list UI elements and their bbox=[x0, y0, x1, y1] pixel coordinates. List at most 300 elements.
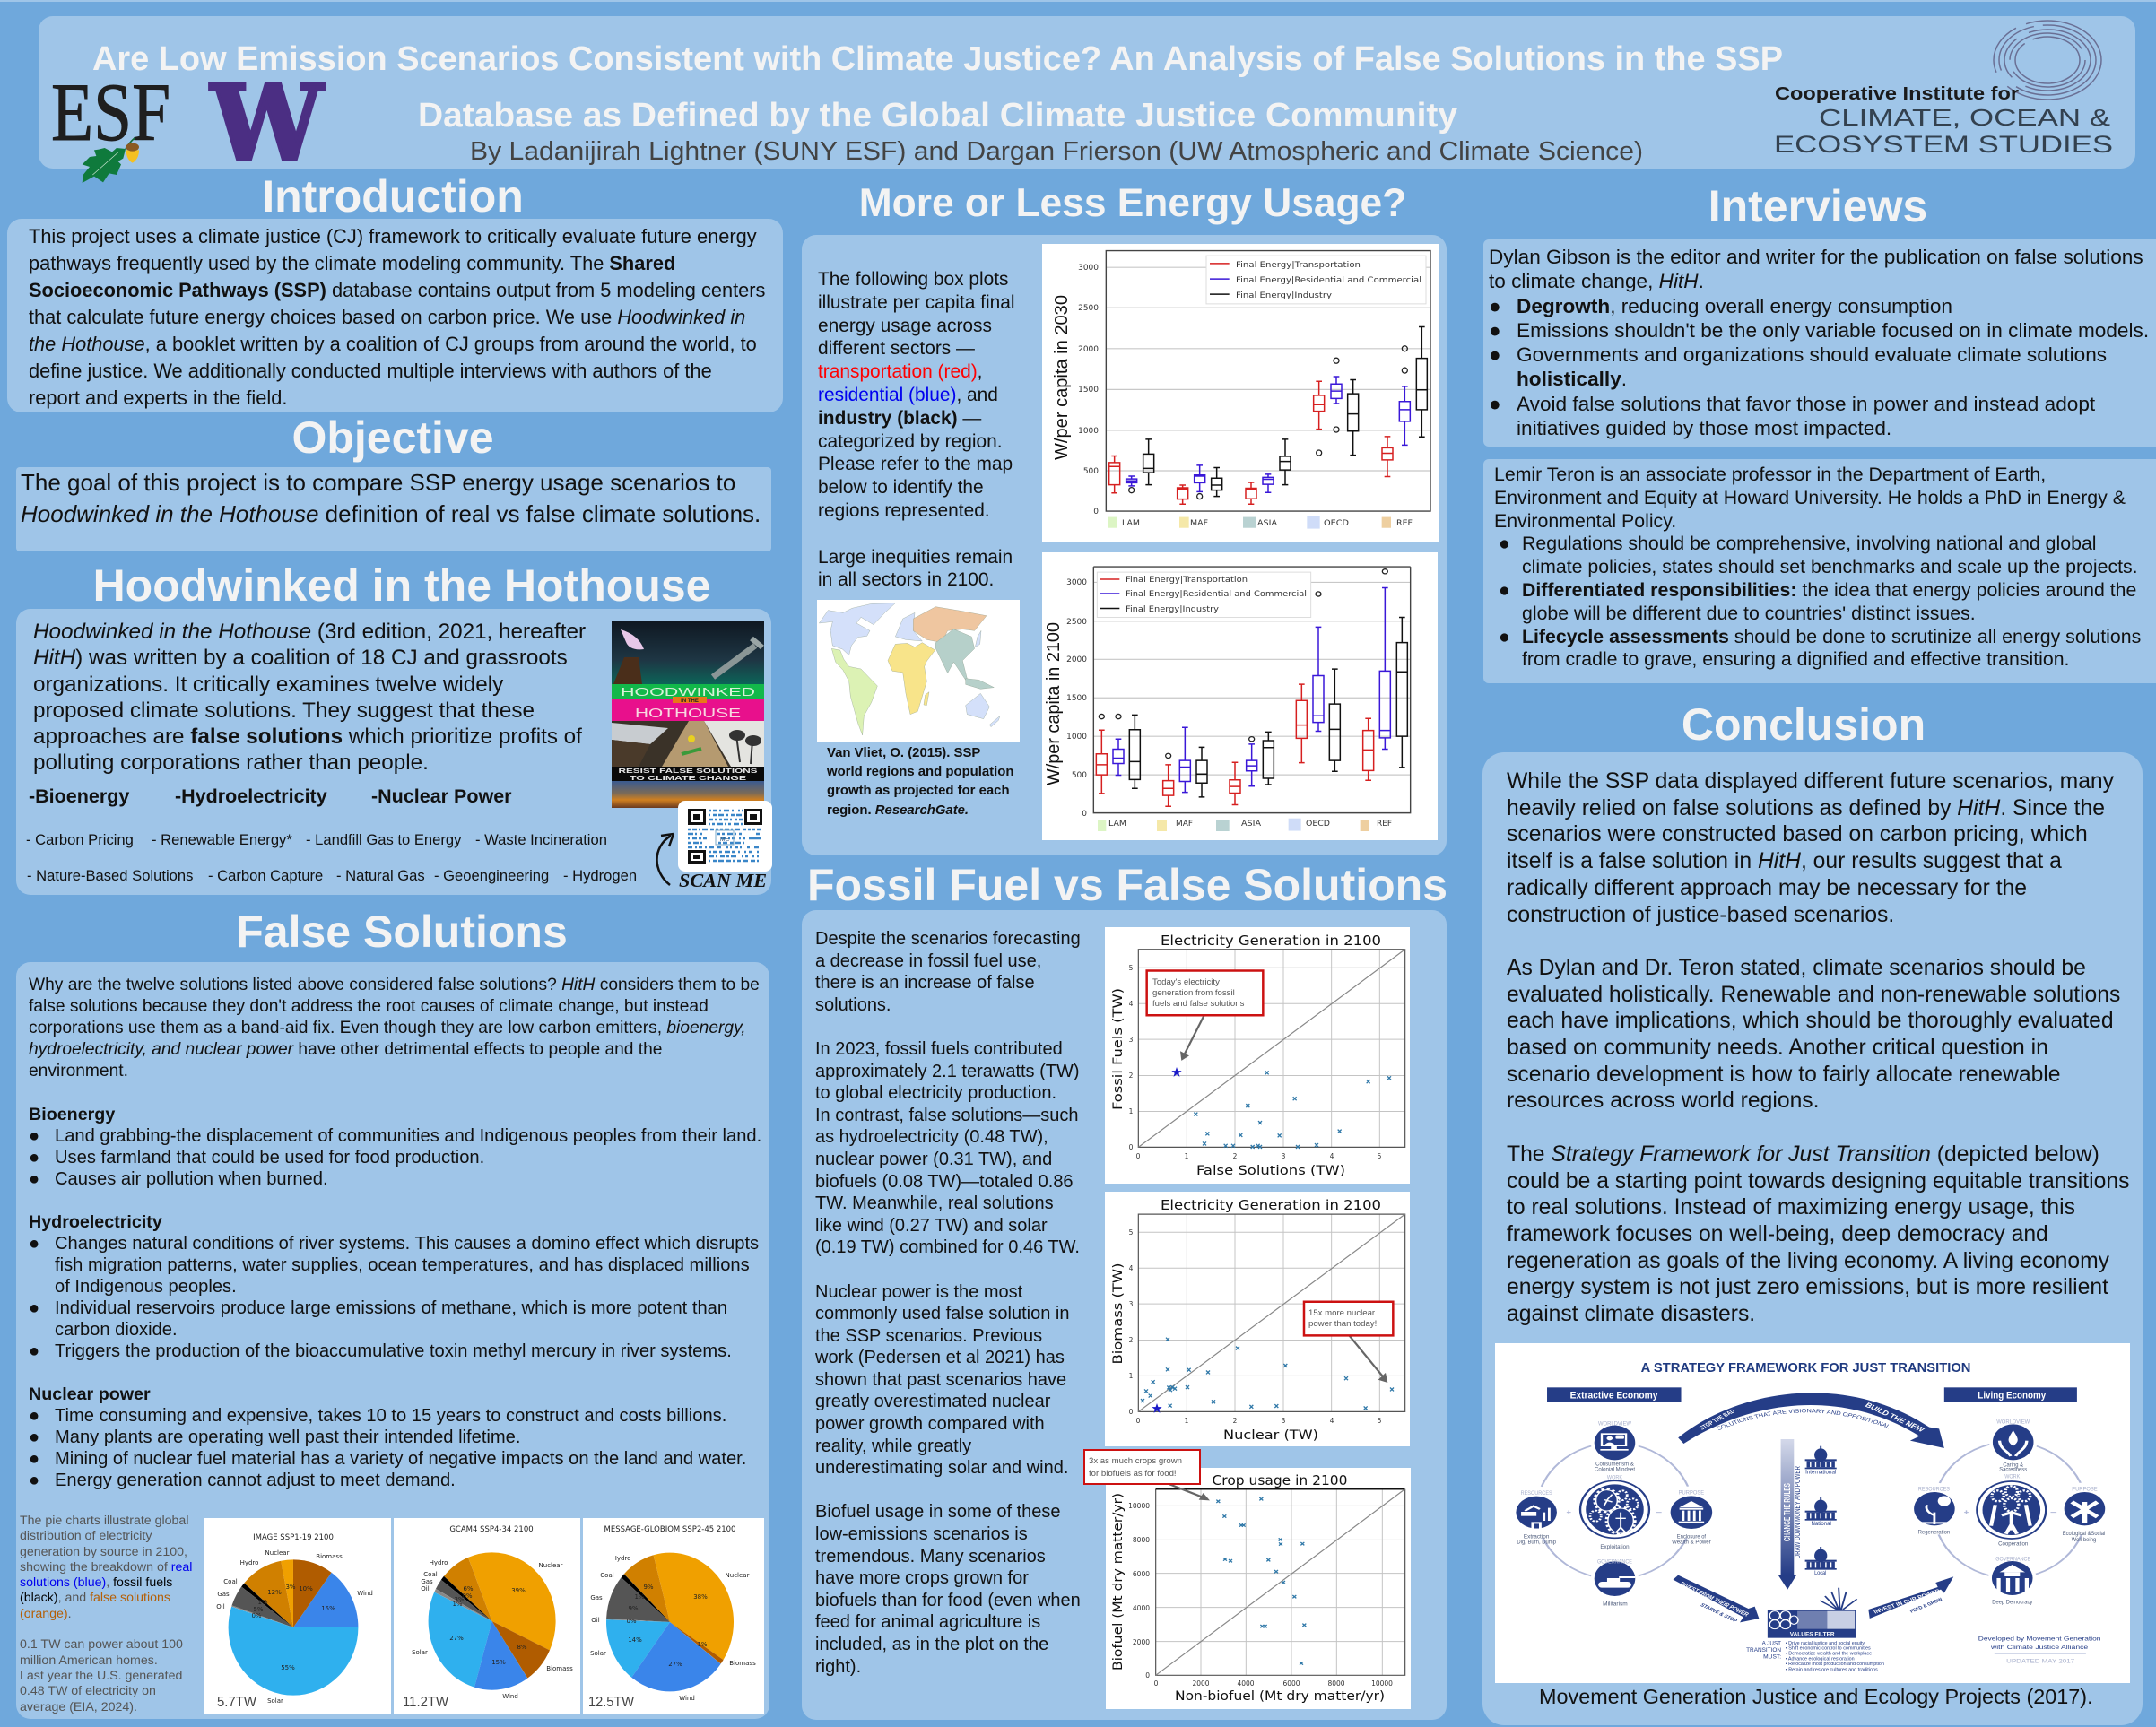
header banner bbox=[39, 16, 2135, 185]
text: introduction: pathways frequently used by the climate modeling community. The Shared bbox=[29, 252, 675, 274]
text: false solutions explanation: Uses farmland that could be used for food production. bbox=[55, 1148, 484, 1167]
text: extractive cycle labels: RESOURCES bbox=[1521, 1489, 1552, 1497]
text: map citation: Van Vliet, O. (2015). SSP bbox=[827, 746, 980, 760]
chart: scatter crop usage: 8000 bbox=[1327, 1679, 1345, 1688]
text: energy usage explanation: industry (black) — bbox=[818, 408, 981, 429]
extractive economy cycle bbox=[1510, 1421, 1717, 1601]
text: other false solutions list: - Carbon Capture bbox=[208, 867, 323, 884]
chart: pie GCAM4 SSP4-34: GCAM4 SSP4-34 2100 bbox=[449, 1525, 534, 1534]
text: pie chart explanation: solutions (blue), fossil fuels bbox=[20, 1575, 172, 1590]
chart: box plot 2100 bbox=[1042, 552, 1438, 840]
text: conclusion: construction of justice-based scenarios. bbox=[1507, 903, 1894, 927]
chart: scatter biomass vs nuclear: 3 bbox=[1129, 1300, 1134, 1308]
chart: scatter crop usage: 2000 bbox=[1133, 1638, 1150, 1646]
text: false solutions explanation bbox=[29, 976, 761, 1490]
text: interview Dylan Gibson: to climate change, HitH. bbox=[1489, 270, 1704, 292]
text: introduction: the Hothouse, a booklet written by a coalition of CJ groups from around the world, to bbox=[29, 333, 757, 355]
text: false solutions explanation: ● bbox=[29, 1234, 39, 1254]
chart: box plot 2100: 2500 bbox=[1066, 618, 1087, 627]
chart: box plot 2030: MAF bbox=[1190, 519, 1208, 528]
text: other false solutions list: - Hydrogen bbox=[563, 867, 637, 884]
text: living cycle labels: Sacredness bbox=[1999, 1466, 2027, 1472]
text: three main false solutions: -Nuclear Power bbox=[371, 785, 512, 807]
text: interview Lemir Teron: Differentiated responsibilities: the idea that energy policies around the bbox=[1522, 579, 2136, 601]
chart: pie GCAM4 SSP4-34: 6% bbox=[463, 1585, 474, 1592]
text: interview Dylan Gibson: Governments and organizations should evaluate climate solutions bbox=[1517, 343, 2107, 366]
text: interview Lemir Teron: ● bbox=[1499, 626, 1510, 647]
text: other false solutions list: - Renewable Energy* bbox=[152, 831, 292, 848]
chart: box plot 2100: MAF bbox=[1176, 820, 1193, 829]
icons: government levels: Local bbox=[1814, 1569, 1827, 1576]
image: Hoodwinked book cover: RESIST FALSE SOLUTIONS bbox=[619, 768, 758, 775]
text: interview Dylan Gibson: Degrowth, reducing overall energy consumption bbox=[1517, 295, 1952, 317]
title: Database as Defined by the Global Climate Justice Community bbox=[418, 97, 1457, 135]
chart: pie MESSAGE-GLOBIOM SSP2-45: Biomass bbox=[729, 1660, 756, 1667]
chart: pie GCAM4 SSP4-34: 39% bbox=[511, 1587, 526, 1594]
text: living cycle labels: Cooperation bbox=[1998, 1540, 2028, 1547]
arrow: change the rules: CHANGE THE RULES bbox=[1782, 1483, 1792, 1541]
chart: box plot 2030: 1000 bbox=[1078, 427, 1099, 436]
text: map citation: growth as projected for each bbox=[827, 784, 1010, 798]
chart: box plot 2030: 2000 bbox=[1078, 345, 1099, 354]
text: false solutions explanation: ● bbox=[29, 1341, 39, 1361]
chart: scatter crop usage: 10000 bbox=[1371, 1679, 1393, 1688]
chart: pie IMAGE SSP1-19: 0% bbox=[251, 1612, 262, 1619]
chart: box plot 2030: 2500 bbox=[1078, 304, 1099, 313]
chart: scatter fossil fuels vs false solutions: generation from fossil bbox=[1152, 988, 1235, 998]
text: energy usage explanation: categorized by region. bbox=[818, 431, 1003, 452]
chart: scatter fossil fuels vs false solutions bbox=[1105, 927, 1410, 1184]
chart: scatter crop usage: 4000 bbox=[1237, 1679, 1255, 1688]
text: fossil fuel explanation: to global electricity production. bbox=[815, 1083, 1056, 1103]
text: fossil fuel explanation: feed for animal agriculture is bbox=[815, 1612, 1040, 1632]
arrow: stop the bad, build the new: STOP THE BAD bbox=[1698, 1408, 1737, 1431]
chart: pie GCAM4 SSP4-34: Biomass bbox=[546, 1665, 573, 1672]
arrow: divest from their power: STARVE & STOP bbox=[1699, 1602, 1738, 1624]
arrow: invest in our power: INVEST IN OUR POWER bbox=[1872, 1587, 1943, 1615]
text: interview Lemir Teron: Environmental Policy. bbox=[1494, 510, 1676, 532]
image: Hoodwinked book cover bbox=[612, 621, 764, 808]
chart: box plot 2030: LAM bbox=[1122, 519, 1140, 528]
text: framework credit: with Climate Justice Alliance bbox=[1990, 1644, 2089, 1651]
text: false solutions explanation: Mining of nuclear fuel material has a variety of negative impacts on the land and water. bbox=[55, 1449, 746, 1469]
text: pie chart explanation: distribution of electricity bbox=[20, 1529, 152, 1543]
text: introduction: This project uses a climate justice (CJ) framework to critically evaluate future energy bbox=[29, 225, 757, 247]
text: false solutions explanation: corporations use them as a band-aid fix. Even though they are low carbon emitters, bioenergy, bbox=[29, 1019, 746, 1037]
living economy cycle bbox=[1908, 1420, 2111, 1600]
heading: More or Less Energy Usage?: More or Less Energy Usage? bbox=[859, 181, 1406, 225]
chart: pie MESSAGE-GLOBIOM SSP2-45 bbox=[583, 1518, 764, 1714]
text: false solutions explanation: ● bbox=[29, 1449, 39, 1469]
label: Living Economy bbox=[1944, 1387, 2077, 1402]
text: energy usage explanation: illustrate per capita final bbox=[818, 292, 1014, 313]
chart: pie MESSAGE-GLOBIOM SSP2-45: MESSAGE-GLOBIOM SSP2-45 2100 bbox=[604, 1525, 735, 1534]
text: fossil fuel explanation: biofuels (0.08 TW)—totaled 0.86 bbox=[815, 1172, 1074, 1192]
text: interview Dylan Gibson: ● bbox=[1489, 393, 1501, 415]
text: fossil fuel explanation: as hydroelectricity (0.48 TW), bbox=[815, 1127, 1048, 1147]
text: interview Dylan Gibson: Avoid false solutions that favor those in power and instead adopt bbox=[1517, 393, 2095, 415]
chart: pie MESSAGE-GLOBIOM SSP2-45: Gas bbox=[590, 1594, 603, 1601]
title bbox=[92, 40, 1783, 135]
chart: box plot 2100: Final Energy|Industry bbox=[1126, 605, 1220, 614]
label: Living Economy: Living Economy bbox=[1978, 1390, 2047, 1401]
chart: scatter biomass vs nuclear: 0 bbox=[1136, 1417, 1141, 1425]
text: conclusion: scenarios were constructed based on carbon pricing, which bbox=[1507, 822, 2088, 846]
text: fossil fuel explanation: right). bbox=[815, 1657, 861, 1677]
text: false solutions explanation: Nuclear power bbox=[29, 1384, 151, 1404]
text: objective: Hoodwinked in the Hothouse definition of real vs false climate solutions. bbox=[21, 500, 761, 527]
chart: scatter fossil fuels vs false solutions: 2 bbox=[1129, 1072, 1134, 1080]
panel: false solutions bbox=[16, 962, 769, 1719]
text: living cycle labels bbox=[1918, 1419, 2106, 1605]
text: false solutions explanation: ● bbox=[29, 1471, 39, 1490]
text: hoodwinked description bbox=[33, 620, 586, 775]
chart: scatter fossil fuels vs false solutions: False Solutions (TW) bbox=[1196, 1164, 1345, 1178]
text: hoodwinked description: polluting corporations rather than people. bbox=[33, 751, 429, 775]
text: three main false solutions: -Bioenergy bbox=[29, 785, 129, 807]
chart: pie IMAGE SSP1-19: Gas bbox=[217, 1591, 230, 1598]
text: conclusion: The Strategy Framework for Just Transition (depicted below) bbox=[1507, 1142, 2099, 1167]
chart: pie GCAM4 SSP4-34: Nuclear bbox=[539, 1562, 563, 1569]
text: extractive cycle labels: Wealth & Power bbox=[1672, 1539, 1711, 1545]
text: conclusion: each have implications, which should be thoroughly evaluated bbox=[1507, 1009, 2114, 1033]
text: interview Dylan Gibson: ● bbox=[1489, 343, 1501, 366]
icon: QR code bbox=[678, 801, 772, 872]
text: a just transition must bbox=[1746, 1640, 1884, 1672]
arrow: change the rules bbox=[1778, 1439, 1802, 1590]
text: other false solutions list: - Geoengineering bbox=[434, 867, 549, 884]
chart: box plot 2100: 0 bbox=[1082, 810, 1087, 819]
text: interview Lemir Teron: Environment and Equity at Howard University. He holds a PhD in Energy & bbox=[1494, 487, 2126, 508]
chart: pie GCAM4 SSP4-34: 15% bbox=[491, 1659, 506, 1666]
chart: pie MESSAGE-GLOBIOM SSP2-45: Wind bbox=[679, 1695, 695, 1702]
chart: box plot 2100: REF bbox=[1377, 820, 1392, 829]
text: extractive cycle labels: PURPOSE bbox=[1679, 1489, 1704, 1496]
text: fossil fuel explanation: TW. Meanwhile, real solutions bbox=[815, 1193, 1054, 1213]
chart: scatter fossil fuels vs false solutions: 3 bbox=[1282, 1152, 1286, 1160]
chart: scatter fossil fuels vs false solutions: 0 bbox=[1136, 1152, 1141, 1160]
text: objective: The goal of this project is to compare SSP energy usage scenarios to bbox=[21, 469, 735, 496]
text: fossil fuel explanation: commonly used false solution in bbox=[815, 1304, 1069, 1323]
text: pie chart explanation: 0.48 TW of electricity on bbox=[20, 1684, 156, 1698]
text: false solutions explanation: carbon dioxide. bbox=[55, 1320, 178, 1340]
text: conclusion: regeneration as goals of the living economy. A living economy bbox=[1507, 1249, 2109, 1273]
chart: scatter fossil fuels vs false solutions: 4 bbox=[1330, 1152, 1334, 1160]
text: hoodwinked description: proposed climate solutions. They suggest that these bbox=[33, 699, 535, 723]
chart: pie GCAM4 SSP4-34 bbox=[394, 1518, 580, 1714]
chart: box plot 2030: ASIA bbox=[1257, 519, 1278, 528]
chart: scatter biomass vs nuclear: Biomass (TW) bbox=[1111, 1263, 1126, 1365]
chart: pie GCAM4 SSP4-34: Gas bbox=[421, 1578, 433, 1585]
text: living cycle labels: GOVERNANCE bbox=[1995, 1556, 2030, 1562]
text: extractive cycle labels: Enclosure of bbox=[1677, 1533, 1707, 1540]
chart: pie MESSAGE-GLOBIOM SSP2-45: 9% bbox=[628, 1605, 639, 1612]
text: fossil fuel explanation: In 2023, fossil fuels contributed bbox=[815, 1039, 1063, 1059]
title: Are Low Emission Scenarios Consistent with Climate Justice? An Analysis of False Solutions in the SSP bbox=[92, 40, 1783, 78]
text: fossil fuel explanation: (0.19 TW) combined for 0.46 TW. bbox=[815, 1237, 1080, 1257]
text: introduction: Socioeconomic Pathways (SSP) database contains output from 5 modeling centers bbox=[29, 279, 765, 301]
chart: pie IMAGE SSP1-19: 15% bbox=[321, 1605, 335, 1612]
heading: False Solutions: False Solutions bbox=[236, 907, 568, 957]
text: introduction bbox=[29, 225, 765, 409]
chart: scatter crop usage: 6000 bbox=[1282, 1679, 1300, 1688]
text: a just transition must: • Democratize wealth and the workplace bbox=[1786, 1652, 1872, 1656]
panel: energy usage bbox=[802, 235, 1447, 855]
heading: Fossil Fuel vs False Solutions: Fossil Fuel vs False Solutions bbox=[807, 860, 1447, 910]
chart: scatter crop usage: 2000 bbox=[1192, 1679, 1210, 1688]
chart: box plot 2030: 1500 bbox=[1078, 386, 1099, 395]
text: hoodwinked description: HitH) was written by a coalition of 18 CJ and grassroots bbox=[33, 646, 568, 670]
text: conclusion: radically different approach may be necessary for the bbox=[1507, 876, 2027, 900]
chart: scatter biomass vs nuclear: Electricity Generation in 2100 bbox=[1161, 1197, 1381, 1213]
text: false solutions explanation: Hydroelectricity bbox=[29, 1212, 162, 1232]
chart: pie IMAGE SSP1-19: 5% bbox=[253, 1606, 264, 1613]
icon: scan me arrow: SCAN ME bbox=[679, 870, 767, 891]
text: pie chart explanation: million American homes. bbox=[20, 1653, 158, 1668]
chart: pie GCAM4 SSP4-34: Solar bbox=[412, 1649, 428, 1656]
text: conclusion bbox=[1507, 769, 2129, 1326]
text: false solutions explanation: Changes natural conditions of river systems. This causes a domino effect which disrupts bbox=[55, 1234, 759, 1254]
text: interview Lemir Teron: Lemir Teron is an associate professor in the Department of Earth, bbox=[1494, 464, 2046, 485]
chart: pie GCAM4 SSP4-34: Coal bbox=[423, 1571, 438, 1578]
authors: By Ladanijirah Lightner (SUNY ESF) and Dargan Frierson (UW Atmospheric and Climate Science) bbox=[470, 137, 1643, 166]
chart: box plot 2100: ASIA bbox=[1241, 820, 1262, 829]
image: Hoodwinked book cover: TO CLIMATE CHANGE bbox=[630, 776, 747, 782]
text: interview Dylan Gibson: initiatives guided by those most impacted. bbox=[1517, 417, 1891, 439]
text: a just transition must: A JUST bbox=[1762, 1640, 1781, 1646]
chart: pie IMAGE SSP1-19: Nuclear bbox=[265, 1549, 290, 1557]
text: energy usage explanation: below to identify the bbox=[818, 477, 984, 498]
text: false solutions explanation: ● bbox=[29, 1126, 39, 1146]
text: other false solutions list bbox=[26, 831, 637, 884]
label: Extractive Economy bbox=[1547, 1387, 1682, 1402]
label: Extractive Economy: Extractive Economy bbox=[1570, 1390, 1658, 1401]
icons: government levels bbox=[1805, 1446, 1837, 1576]
text: fossil fuel explanation: low-emissions scenarios is bbox=[815, 1524, 1028, 1544]
text: false solutions explanation: ● bbox=[29, 1428, 39, 1447]
arrow: divest from their power: DIVEST FROM THEIR POWER bbox=[1678, 1581, 1752, 1618]
chart: pie GCAM4 SSP4-34: Wind bbox=[502, 1693, 518, 1700]
text: energy usage explanation: Please refer to the map bbox=[818, 454, 1013, 474]
heading: Objective: Objective bbox=[291, 412, 494, 463]
chart: scatter fossil fuels vs false solutions: 1 bbox=[1129, 1107, 1134, 1115]
text: fossil fuel explanation: a decrease in fossil fuel use, bbox=[815, 951, 1041, 971]
chart: pie IMAGE SSP1-19: IMAGE SSP1-19 2100 bbox=[253, 1533, 334, 1542]
chart: scatter crop usage: 0 bbox=[1145, 1671, 1150, 1679]
text: false solutions explanation: Causes air pollution when burned. bbox=[55, 1169, 328, 1189]
text: hoodwinked description: approaches are false solutions which prioritize profits of bbox=[33, 725, 582, 749]
icon: QR code: ME bbox=[720, 837, 730, 843]
chart: pie GCAM4 SSP4-34: 3% bbox=[454, 1596, 465, 1603]
chart: box plot 2100: 1500 bbox=[1066, 694, 1087, 703]
chart: scatter crop usage: Non-biofuel (Mt dry matter/yr) bbox=[1175, 1689, 1385, 1704]
text: hoodwinked description: organizations. It critically examines twelve widely bbox=[33, 673, 503, 697]
chart: scatter crop usage: Biofuel (Mt dry matter/yr) bbox=[1111, 1493, 1126, 1671]
chart: pie IMAGE SSP1-19: Biomass bbox=[316, 1553, 343, 1560]
chart: scatter biomass vs nuclear: power than today! bbox=[1308, 1319, 1377, 1329]
chart: scatter biomass vs nuclear: 4 bbox=[1330, 1417, 1334, 1425]
text: pie chart explanation: The pie charts illustrate global bbox=[20, 1514, 188, 1528]
chart: pie MESSAGE-GLOBIOM SSP2-45: Oil bbox=[591, 1617, 600, 1624]
arrow: stop the bad, build the new bbox=[1678, 1393, 1944, 1448]
text: false solutions explanation: ● bbox=[29, 1406, 39, 1426]
chart: pie IMAGE SSP1-19: 10% bbox=[299, 1585, 313, 1592]
chart: pie GCAM4 SSP4-34: Hydro bbox=[430, 1559, 448, 1566]
chart: scatter fossil fuels vs false solutions: Fossil Fuels (TW) bbox=[1111, 988, 1126, 1110]
text: fossil fuel explanation: biofuels than for food (even when bbox=[815, 1591, 1081, 1610]
chart: scatter crop usage: 6000 bbox=[1133, 1570, 1150, 1578]
text: other false solutions list: - Nature-Based Solutions bbox=[27, 867, 193, 884]
text: interview Dylan Gibson: Emissions shouldn't be the only variable focused on in climate models. bbox=[1517, 319, 2149, 342]
text: living cycle labels: Ecological &Social bbox=[2063, 1530, 2106, 1537]
arrow: stop the bad, build the new: SOLUTIONS THAT ARE VISIONARY AND OPPOSITIONAL bbox=[1717, 1409, 1889, 1430]
panel: interview Lemir Teron bbox=[1483, 459, 2156, 683]
text: pie chart explanation: (orange). bbox=[20, 1607, 72, 1621]
text: interview Lemir Teron: climate policies, states should set benchmarks and scale up the projects. bbox=[1522, 556, 2138, 577]
chart: box plot 2100: 3000 bbox=[1066, 578, 1087, 587]
logo: CICOES: Cooperative Institute for bbox=[1775, 84, 2019, 104]
text: energy usage explanation: The following box plots bbox=[818, 269, 1009, 290]
text: living cycle labels: Well-being bbox=[2072, 1536, 2096, 1543]
text: introduction: that calculate future energy choices based on carbon price. We use Hoodwinked in bbox=[29, 306, 745, 328]
text: extractive cycle labels bbox=[1517, 1420, 1711, 1607]
chart: scatter fossil fuels vs false solutions: 0 bbox=[1129, 1143, 1134, 1151]
text: energy usage explanation: Large inequities remain bbox=[818, 547, 1013, 568]
chart: box plot 2030: Final Energy|Residential and Commercial bbox=[1236, 276, 1421, 285]
image: Hoodwinked book cover: IN THE bbox=[681, 699, 699, 704]
text: fossil fuel explanation: shown that past scenarios have bbox=[815, 1370, 1066, 1390]
panel: introduction bbox=[7, 219, 783, 412]
text: energy usage explanation: regions represented. bbox=[818, 500, 990, 521]
text: false solutions explanation: Bioenergy bbox=[29, 1105, 115, 1124]
text: fossil fuel explanation: Nuclear power is the most bbox=[815, 1282, 1022, 1302]
text: living cycle labels: Deep Democracy bbox=[1992, 1599, 2033, 1605]
chart: scatter biomass vs nuclear: 0 bbox=[1129, 1408, 1134, 1416]
chart: pie GCAM4 SSP4-34: 1% bbox=[452, 1601, 463, 1608]
text: interview Lemir Teron: globe will be different due to countries' distinct issues. bbox=[1522, 603, 1976, 624]
text: false solutions explanation: ● bbox=[29, 1298, 39, 1318]
chart: pie MESSAGE-GLOBIOM SSP2-45: 14% bbox=[628, 1636, 642, 1644]
text: living cycle labels: Caring & bbox=[2003, 1462, 2023, 1468]
text: energy usage explanation: different sectors — bbox=[818, 338, 975, 359]
chart: scatter fossil fuels vs false solutions: 5 bbox=[1129, 964, 1134, 972]
text: conclusion: As Dylan and Dr. Teron stated, climate scenarios should be bbox=[1507, 956, 2086, 980]
chart: pie IMAGE SSP1-19: 3% bbox=[285, 1584, 296, 1591]
text: conclusion: framework focuses on well-being, deep democracy and bbox=[1507, 1222, 2048, 1246]
text: framework citation: Movement Generation Justice and Ecology Projects (2017). bbox=[1539, 1685, 2093, 1708]
text: framework credit: UPDATED MAY 2017 bbox=[2006, 1658, 2074, 1664]
text: fossil fuel explanation: nuclear power (0.31 TW), and bbox=[815, 1150, 1052, 1169]
icon: values filter: VALUES FILTER bbox=[1790, 1631, 1835, 1637]
text: living cycle labels: RESOURCES bbox=[1918, 1486, 1950, 1492]
chart: box plot 2030: Final Energy|Industry bbox=[1236, 291, 1333, 300]
text: false solutions explanation: Energy generation cannot adjust to meet demand. bbox=[55, 1471, 456, 1490]
heading: Hoodwinked in the Hothouse: Hoodwinked in the Hothouse bbox=[93, 560, 710, 611]
text: false solutions explanation: of Indigenous peoples. bbox=[55, 1277, 237, 1297]
text: pie chart explanation: 0.1 TW can power about 100 bbox=[20, 1637, 183, 1652]
chart: scatter crop usage: for biofuels as for food! bbox=[1089, 1469, 1177, 1479]
chart: pie GCAM4 SSP4-34: Oil bbox=[421, 1585, 430, 1592]
text: energy usage explanation: in all sectors in 2100. bbox=[818, 569, 994, 590]
text: energy usage explanation: residential (blue), and bbox=[818, 385, 998, 405]
text: conclusion: scenario development is how to fairly allocate renewable bbox=[1507, 1063, 2061, 1087]
text: three main false solutions bbox=[29, 785, 512, 807]
text: introduction: report and experts in the field. bbox=[29, 386, 287, 409]
text: false solutions explanation: fish migration patterns, water supplies, ocean temperatures, and has displaced millions bbox=[55, 1255, 750, 1275]
text: false solutions explanation: hydroelectricity, and nuclear power have other detrimental effects to people and the bbox=[29, 1040, 662, 1059]
text: fossil fuel explanation: there is an increase of false bbox=[815, 973, 1035, 993]
chart: pie MESSAGE-GLOBIOM SSP2-45: 1% bbox=[697, 1641, 708, 1648]
text: other false solutions list: - Landfill Gas to Energy bbox=[306, 831, 461, 848]
text: fossil fuel explanation: In contrast, false solutions—such bbox=[815, 1106, 1078, 1125]
text: false solutions explanation: Land grabbing-the displacement of communities and Indigenous peoples from their land. bbox=[55, 1126, 761, 1146]
chart: scatter biomass vs nuclear: 2 bbox=[1129, 1336, 1134, 1344]
chart: scatter fossil fuels vs false solutions: 5 bbox=[1378, 1152, 1382, 1160]
text: pie chart explanation bbox=[20, 1514, 192, 1714]
text: false solutions explanation: ● bbox=[29, 1148, 39, 1167]
chart: pie IMAGE SSP1-19: 5.7TW bbox=[217, 1695, 257, 1710]
chart: box plot 2030: REF bbox=[1396, 519, 1413, 528]
logo: CICOES: CLIMATE, OCEAN & bbox=[1819, 104, 2110, 131]
text: hoodwinked description: Hoodwinked in the Hothouse (3rd edition, 2021, hereafter bbox=[33, 620, 586, 644]
text: a just transition must: • Shift economic control to communities bbox=[1786, 1646, 1871, 1651]
text: fossil fuel explanation: like wind (0.27 TW) and solar bbox=[815, 1216, 1048, 1236]
icons: government levels: International bbox=[1805, 1469, 1837, 1475]
image: Hoodwinked book cover: HOODWINKED bbox=[621, 685, 755, 699]
text: living cycle labels: WORLDVIEW bbox=[1996, 1419, 2030, 1425]
text: conclusion: energy system is not just zero emissions, but is more resilient bbox=[1507, 1275, 2108, 1299]
chart: pie MESSAGE-GLOBIOM SSP2-45: 1% bbox=[634, 1593, 645, 1601]
text: conclusion: against climate disasters. bbox=[1507, 1302, 1755, 1326]
text: fossil fuel explanation: solutions. bbox=[815, 995, 891, 1015]
icon: scan me arrow bbox=[656, 832, 767, 891]
image: Hoodwinked book cover: HOTHOUSE bbox=[635, 706, 741, 721]
text: conclusion: itself is a false solution in HitH, our results suggest that a bbox=[1507, 849, 2062, 873]
text: fossil fuel explanation: the SSP scenarios. Previous bbox=[815, 1326, 1042, 1346]
chart: pie MESSAGE-GLOBIOM SSP2-45: 12.5TW bbox=[588, 1695, 635, 1710]
text: energy usage explanation: energy usage across bbox=[818, 316, 992, 336]
logo: University of Washington W: W bbox=[209, 63, 325, 185]
chart: box plot 2030: 0 bbox=[1093, 508, 1099, 516]
chart: box plot 2100: Final Energy|Transportation bbox=[1126, 576, 1248, 585]
text: objective bbox=[21, 469, 761, 527]
chart: box plot 2100: OECD bbox=[1306, 820, 1330, 829]
chart: scatter fossil fuels vs false solutions: 1 bbox=[1185, 1152, 1189, 1160]
text: extractive cycle labels: Consumerism & bbox=[1595, 1461, 1634, 1467]
chart: box plot 2030: 3000 bbox=[1078, 264, 1099, 273]
text: fossil fuel explanation: Biofuel usage in some of these bbox=[815, 1502, 1061, 1522]
text: fossil fuel explanation: Despite the scenarios forecasting bbox=[815, 929, 1081, 949]
chart: box plot 2100: W/per capita in 2100 bbox=[1044, 622, 1064, 785]
chart: scatter crop usage: 10000 bbox=[1128, 1502, 1150, 1510]
chart: scatter crop usage: 3x as much crops grown bbox=[1089, 1456, 1182, 1466]
chart: pie MESSAGE-GLOBIOM SSP2-45: 9% bbox=[643, 1584, 654, 1591]
text: conclusion: based on community needs. Another critical question in bbox=[1507, 1036, 2048, 1060]
chart: pie MESSAGE-GLOBIOM SSP2-45: 27% bbox=[668, 1661, 682, 1668]
text: map citation: region. ResearchGate. bbox=[827, 803, 969, 818]
chart: box plot 2030 bbox=[1042, 244, 1439, 542]
text: map citation: world regions and population bbox=[827, 765, 1013, 779]
logo: ESF: ESF bbox=[51, 66, 170, 158]
text: conclusion: could be a starting point towards designing equitable transitions bbox=[1507, 1169, 2129, 1193]
text: pie chart explanation: average (EIA, 2024). bbox=[20, 1700, 137, 1714]
panel: fossil fuel vs false solutions bbox=[802, 910, 1447, 1720]
text: false solutions explanation: Why are the twelve solutions listed above considered false solutions? HitH considers them to be bbox=[29, 976, 760, 994]
text: fossil fuel explanation bbox=[815, 929, 1081, 1677]
text: extractive cycle labels: Colonial Mindset bbox=[1595, 1466, 1635, 1472]
text: interview Lemir Teron: from cradle to grave, ensuring a dignified and effective transition. bbox=[1522, 648, 2069, 670]
text: other false solutions list: - Waste Incineration bbox=[475, 831, 607, 848]
